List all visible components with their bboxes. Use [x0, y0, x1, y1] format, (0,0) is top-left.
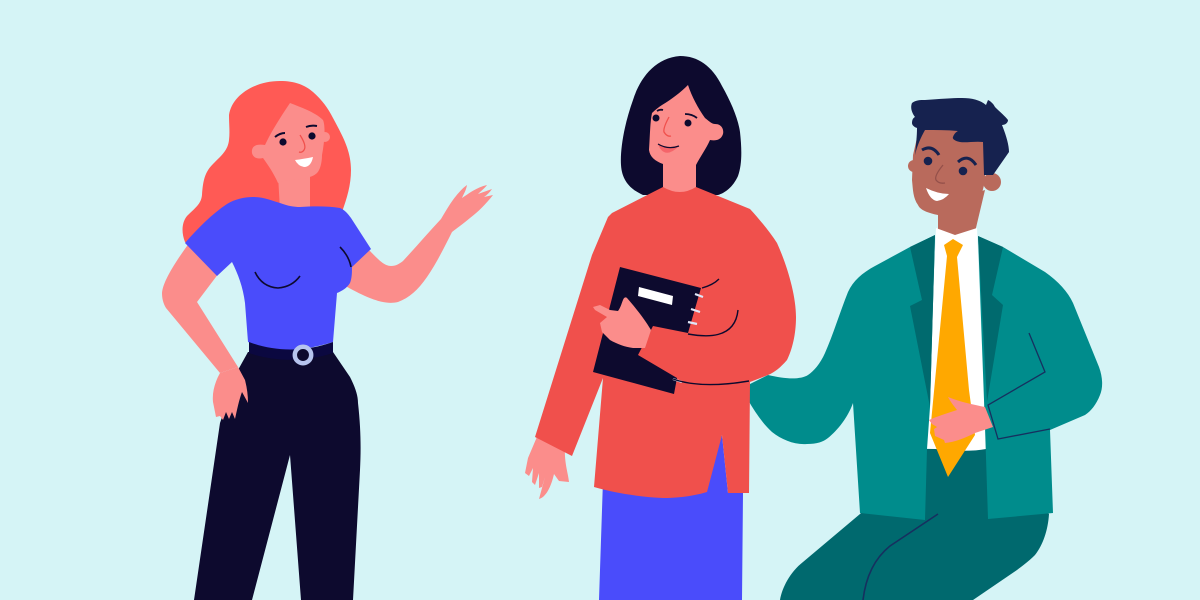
- blue top: [185, 197, 371, 350]
- face: [252, 103, 325, 183]
- eyes and brows: [922, 148, 976, 175]
- nose: [664, 117, 671, 136]
- red hair: [183, 81, 351, 245]
- figure: woman with black hair: [525, 56, 796, 600]
- chest lines: [255, 247, 351, 288]
- green trousers: [780, 449, 1049, 600]
- spiral rings: [673, 294, 703, 382]
- orange tie: [930, 239, 975, 477]
- white shirt: [927, 228, 986, 451]
- eyes and brows: [652, 110, 697, 126]
- right ear: [320, 132, 330, 142]
- face: [649, 85, 723, 165]
- belt buckle: [295, 347, 311, 363]
- sleeve folds: [673, 279, 749, 384]
- red sweater: [535, 187, 796, 498]
- hand: [929, 397, 993, 443]
- hand over pants: [213, 367, 248, 420]
- black pants: [194, 352, 361, 600]
- green jacket: [748, 235, 1102, 520]
- nose: [299, 135, 305, 152]
- trouser crease: [863, 514, 938, 600]
- smile: [926, 188, 949, 201]
- smile: [295, 157, 313, 167]
- nose: [936, 165, 945, 183]
- black hair: [621, 56, 741, 195]
- sleeve seam: [988, 333, 1050, 439]
- notebook label: [638, 287, 673, 305]
- eyes and brows: [275, 126, 317, 146]
- figure: woman with red hair: [162, 81, 493, 600]
- mouth: [658, 144, 679, 153]
- hair: [911, 98, 1009, 175]
- neck: [938, 190, 985, 240]
- neck: [663, 160, 696, 192]
- notebook: [593, 267, 703, 394]
- raised right arm: [340, 185, 493, 303]
- right ear: [983, 173, 1001, 191]
- hand on notebook: [593, 297, 651, 348]
- face: [912, 125, 985, 215]
- left arm on hip: [162, 235, 238, 373]
- figure: man in green suit: [748, 98, 1102, 600]
- dark lapels: [910, 235, 1003, 407]
- left ear: [908, 160, 920, 172]
- belt: [249, 342, 333, 360]
- neck: [278, 165, 318, 210]
- blue skirt: [599, 435, 743, 600]
- left hand: [525, 425, 569, 499]
